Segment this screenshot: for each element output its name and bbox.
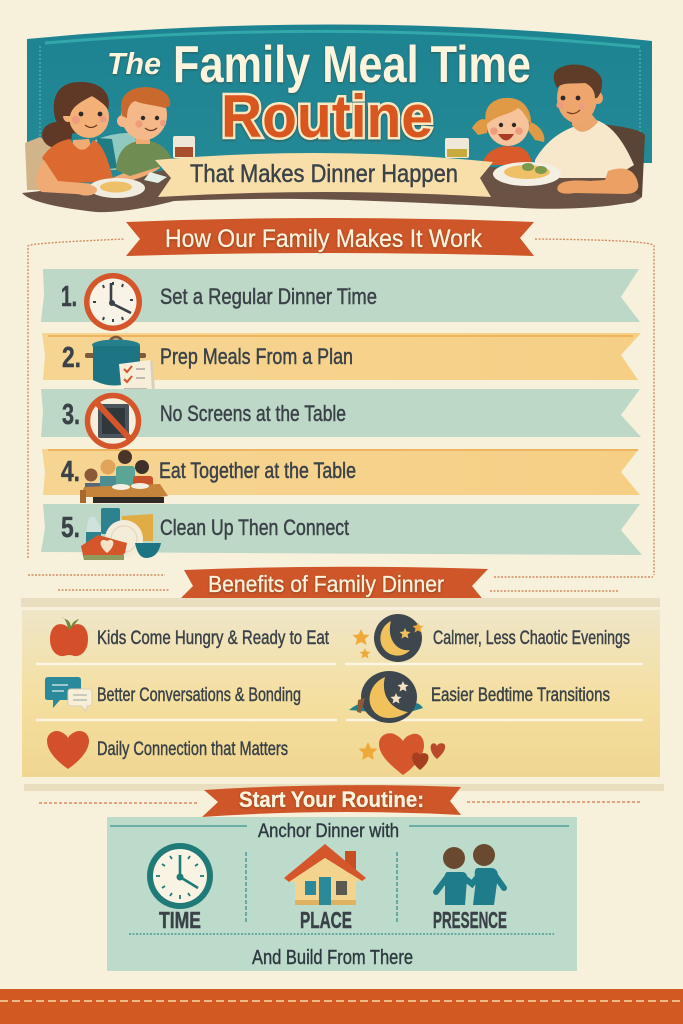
panel: start your routine: And Build From There (252, 947, 413, 969)
right plate (493, 162, 561, 186)
benefits bottom band (24, 784, 664, 791)
chairs (25, 124, 645, 197)
left plate (75, 172, 167, 198)
icon: moon and stars (352, 614, 424, 662)
step 5: Clean Up Then Connect (160, 515, 349, 540)
panel: start your routine (107, 817, 577, 971)
icon: house (284, 844, 366, 905)
section ribbon: how our family: How Our Family Makes It Work (165, 225, 482, 253)
section ribbon: start your routine (202, 785, 461, 817)
icon: no screens (85, 393, 141, 449)
subtitle: That Makes Dinner Happen (190, 160, 458, 188)
step 1 (41, 269, 640, 331)
benefits top band (21, 598, 660, 607)
section ribbon: benefits (176, 567, 488, 603)
left glass (173, 136, 195, 158)
step 3 (41, 389, 641, 449)
table (22, 167, 642, 212)
right glass (445, 138, 469, 158)
panel: benefits (22, 610, 660, 777)
step 3: No Screens at the Table (160, 401, 346, 426)
step 4: 4. (61, 456, 80, 488)
icon: pot and checklist (85, 337, 155, 397)
icon: clock (84, 273, 142, 331)
icon: family at table (80, 450, 168, 503)
icon: two people (436, 844, 504, 905)
icon: hearts and star (358, 733, 445, 775)
panel: benefits: Better Conversations & Bonding (97, 685, 301, 706)
step 5 (41, 504, 642, 560)
teal banner background (27, 24, 652, 185)
step 5: 5. (61, 512, 80, 544)
panel: benefits: Daily Connection that Matters (97, 739, 288, 760)
step 1: Set a Regular Dinner Time (160, 284, 377, 309)
footer band (0, 989, 683, 1024)
icon: moon with wings (349, 671, 423, 723)
step 2: 2. (62, 342, 81, 374)
title: Family Meal Time (173, 36, 531, 94)
step 4 (42, 449, 640, 503)
section ribbon: how our family (126, 218, 534, 256)
icon: clock (147, 843, 213, 909)
step 2 (42, 333, 641, 397)
step 3: 3. (62, 399, 80, 431)
step 2: Prep Meals From a Plan (160, 344, 353, 369)
panel: start your routine: Anchor Dinner with (258, 821, 399, 842)
girl (472, 98, 544, 165)
boy (116, 87, 171, 176)
start routine dashed lines (39, 802, 640, 803)
panel: start your routine: PRESENCE (433, 907, 507, 933)
panel: start your routine: TIME (159, 907, 201, 933)
panel: benefits: Kids Come Hungry & Ready to Eat (97, 628, 330, 649)
step 1: 1. (61, 281, 77, 313)
section ribbon: benefits: Benefits of Family Dinner (208, 571, 444, 597)
header banner (22, 24, 652, 212)
subtitle ribbon (155, 153, 493, 197)
title (107, 36, 531, 150)
panel: benefits: Easier Bedtime Transitions (431, 685, 610, 706)
icon: speech bubbles (45, 677, 92, 711)
how our family dotted frame (28, 239, 654, 591)
father (535, 65, 638, 194)
title: The (107, 46, 161, 81)
title: Routine (221, 83, 433, 150)
icon: apple (50, 617, 88, 656)
mother (36, 82, 160, 195)
step 4: Eat Together at the Table (159, 458, 356, 483)
icon: cleaning items (81, 508, 161, 560)
panel: start your routine: PLACE (300, 907, 352, 933)
section ribbon: start your routine: Start Your Routine: (239, 787, 424, 812)
icon: heart (47, 731, 89, 769)
